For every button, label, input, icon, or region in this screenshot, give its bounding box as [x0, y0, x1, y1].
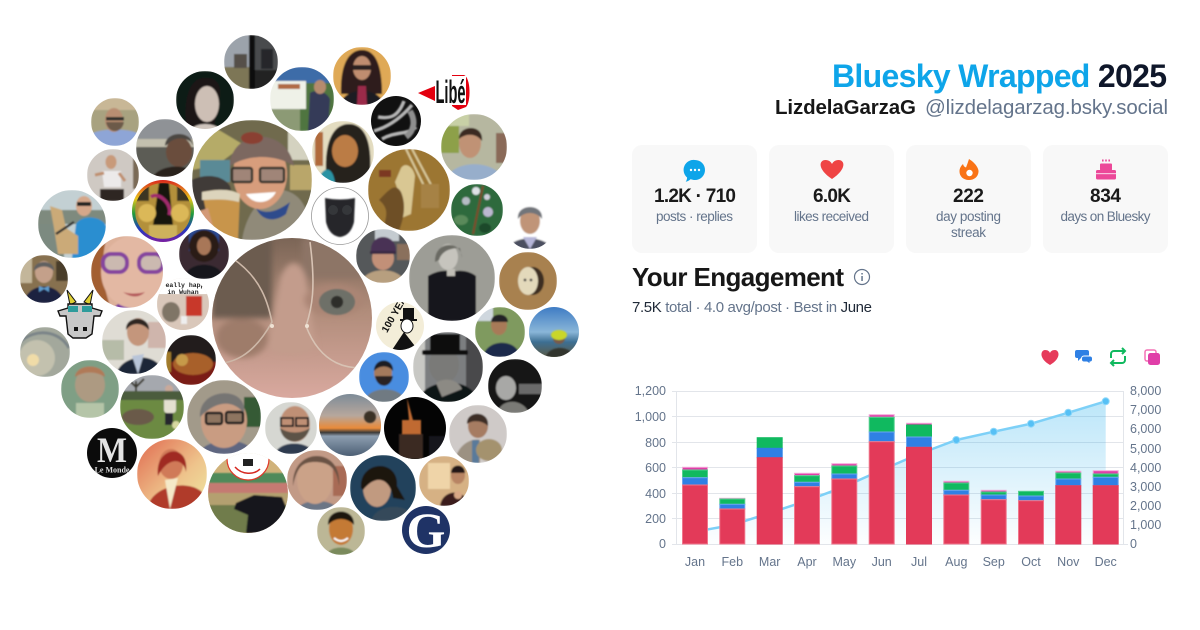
avatar: man in blue shirt: [91, 98, 139, 146]
stat card: posts and replies: 1.2K · 710: [654, 186, 736, 207]
avatar: close-up face with glasses (largest): [212, 238, 372, 398]
right axis labels: 2,000: [1130, 499, 1161, 513]
right axis labels: [1130, 384, 1161, 551]
icon: info: [854, 270, 870, 284]
legend icon: quotes: [1145, 350, 1160, 365]
avatar: gray-haired man by water: [136, 119, 194, 177]
left axis labels: 800: [645, 436, 666, 450]
month labels: May: [832, 555, 857, 569]
avatar: black dog with badge: [208, 453, 288, 533]
avatar: cat in a room with text: [157, 278, 209, 332]
grid lines: [672, 391, 1128, 544]
avatar: painted green baby face: [61, 360, 119, 418]
avatar cluster: [19, 35, 579, 558]
stat card: streak: 222: [953, 186, 984, 207]
bar: Sep: [981, 490, 1006, 544]
avatar: woman with curly hair: [179, 229, 229, 279]
month labels: Nov: [1057, 555, 1080, 569]
avatar: flowering plant: [451, 184, 503, 236]
engagement summary: 7.5K total · 4.0 avg/post · Best in June: [632, 299, 872, 316]
avatar: watchtower: [224, 35, 278, 89]
avatar: bearded man with glasses: [265, 402, 317, 454]
avatar: man in purple cap: [356, 229, 410, 283]
handle: @lizdelagarzag.bsky.social: [925, 96, 1168, 119]
avatar: ornate coat of arms with rainbow ring: [132, 180, 194, 242]
avatar: man with bow tie: [20, 255, 68, 303]
left axis labels: 0: [659, 537, 666, 551]
avatar: cat on red cushion: [166, 335, 216, 385]
bar: Nov: [1056, 471, 1081, 544]
legend icon: likes: [1041, 350, 1059, 365]
bar: Aug: [944, 481, 969, 544]
avatar: man with dog: [38, 190, 106, 258]
left axis labels: 600: [645, 461, 666, 475]
icon: heart: [821, 160, 843, 179]
avatar: pebble face on sand: [499, 252, 557, 310]
legend icon: reposts: [1111, 348, 1125, 366]
month labels: Jan: [685, 555, 705, 569]
avatar: sunset over snow: [319, 394, 381, 456]
bar: Apr: [794, 473, 820, 544]
stat card: likes: likes received: [794, 209, 869, 224]
avatar: Le Monde logo: M: [97, 430, 127, 470]
bar: May: [832, 464, 857, 544]
month labels: Dec: [1095, 555, 1117, 569]
avatar: sepia ladder photo: [368, 149, 450, 231]
avatar: woman on orange background: [333, 47, 391, 105]
right axis labels: 7,000: [1130, 403, 1161, 417]
title: Bluesky Wrapped 2025: [832, 58, 1167, 94]
month labels: Mar: [759, 555, 780, 569]
avatar: person in a garden: [120, 375, 184, 439]
avatar: Libé logo: [418, 74, 470, 110]
avatar: man in tan blazer: [449, 405, 507, 463]
cumulative area: [695, 401, 1106, 544]
avatar: black and white swirl: [371, 96, 421, 146]
avatar: cat in a room with text: really happ: [162, 282, 205, 289]
avatar: smiling man with beer: [192, 120, 312, 240]
avatar: photo at Malcombe House: [270, 67, 334, 131]
month labels: Apr: [797, 555, 817, 569]
month labels: Jul: [911, 555, 927, 569]
avatar: yellow bike helmet by the sea: [529, 307, 579, 357]
stat card: streak: streak: [951, 225, 986, 240]
avatar: Empire State Building at night: [384, 397, 446, 459]
bar: Jun: [869, 415, 894, 544]
stat card: likes: 6.0K: [813, 186, 851, 207]
right axis labels: 6,000: [1130, 422, 1161, 436]
right axis labels: 4,000: [1130, 461, 1161, 475]
avatar: pixel cow: [58, 290, 102, 338]
bar: Feb: [720, 498, 745, 544]
avatar: speaker with white shirt: [87, 149, 139, 201]
avatar: woman, black and white portrait: [409, 235, 495, 321]
avatar: man with glasses, gray hair: [187, 380, 261, 454]
stat card: days on Bluesky: days on Bluesky: [1060, 209, 1151, 224]
avatar: Le Monde logo: [87, 428, 137, 478]
stat card: days on Bluesky: [1043, 145, 1168, 253]
avatar: older man in suit: [513, 206, 546, 249]
chart: monthly engagement: [635, 384, 1161, 569]
icon: cake: [1096, 160, 1116, 180]
right axis labels: 0: [1130, 537, 1137, 551]
left axis labels: 1,200: [635, 384, 666, 398]
avatar: black owl vase: [312, 188, 368, 244]
avatar: 100 Years cartoon: [376, 302, 424, 350]
stat card: likes: [769, 145, 894, 253]
heading: Your Engagement: Your Engagement: [632, 262, 844, 292]
stat card: streak: day posting: [936, 209, 1001, 224]
avatar: man with glasses and tousled hair: [287, 450, 347, 510]
stacked bars: [682, 415, 1118, 544]
right axis labels: 3,000: [1130, 480, 1161, 494]
month labels: Aug: [945, 555, 967, 569]
avatar: cat in a room with text: in Wuhan: [167, 289, 199, 296]
left axis labels: [635, 384, 666, 551]
right axis labels: 1,000: [1130, 518, 1161, 532]
cumulative line: [695, 398, 1109, 532]
avatar: red duotone man: [137, 439, 207, 509]
left axis labels: 1,000: [635, 410, 666, 424]
avatar: old man in dark, grayscale: [488, 359, 542, 413]
avatar: 100 Years cartoon: 100 YEARS: [380, 282, 417, 335]
icon: chat bubble: [684, 160, 705, 182]
avatar: Le Monde logo: Le Monde: [95, 466, 130, 474]
avatar: illustrated man with glasses: [317, 507, 365, 555]
display name: LizdelaGarzaG: [775, 96, 916, 119]
avatar: gray tunnel engraving: [19, 327, 70, 377]
right axis labels: 5,000: [1130, 442, 1161, 456]
bar: Oct: [1018, 491, 1044, 544]
bar: Dec: [1093, 471, 1118, 544]
stat card: streak: [906, 145, 1031, 253]
avatar: young man in dark suit: [102, 310, 166, 374]
avatar: man holding ice cream: [419, 456, 469, 506]
icon: flame: [960, 159, 979, 180]
avatar: dark-haired woman: [176, 71, 234, 130]
bar: Jul: [906, 423, 932, 544]
stat card: posts and replies: [632, 145, 757, 253]
avatar: Guardian G logo: G: [407, 502, 445, 558]
avatar: man in blue shirt by window: [441, 114, 507, 180]
month labels: Feb: [722, 555, 743, 569]
avatar: man in top hat, grayscale: [413, 332, 483, 402]
bar: Mar: [757, 438, 782, 544]
stat card: posts and replies: posts · replies: [656, 209, 733, 224]
left axis labels: 200: [645, 512, 666, 526]
right axis labels: 8,000: [1130, 384, 1161, 398]
avatar: man with navy shirt outdoors: [475, 307, 525, 357]
avatar: bearded man on blue sky: [359, 352, 409, 402]
month labels: [685, 555, 1117, 569]
stat card: days on Bluesky: 834: [1090, 186, 1121, 207]
avatar: woman with purple glasses: [91, 236, 165, 308]
month labels: Oct: [1021, 555, 1041, 569]
legend icon: replies: [1075, 350, 1092, 364]
bar: Jan: [682, 467, 708, 544]
avatar: Libé logo: Libé: [436, 74, 466, 110]
avatar: woman with long dark hair: [312, 121, 374, 183]
month labels: Jun: [872, 555, 892, 569]
month labels: Sep: [983, 555, 1005, 569]
avatar: dark-haired man on blue: [350, 455, 416, 521]
left axis labels: 400: [645, 487, 666, 501]
